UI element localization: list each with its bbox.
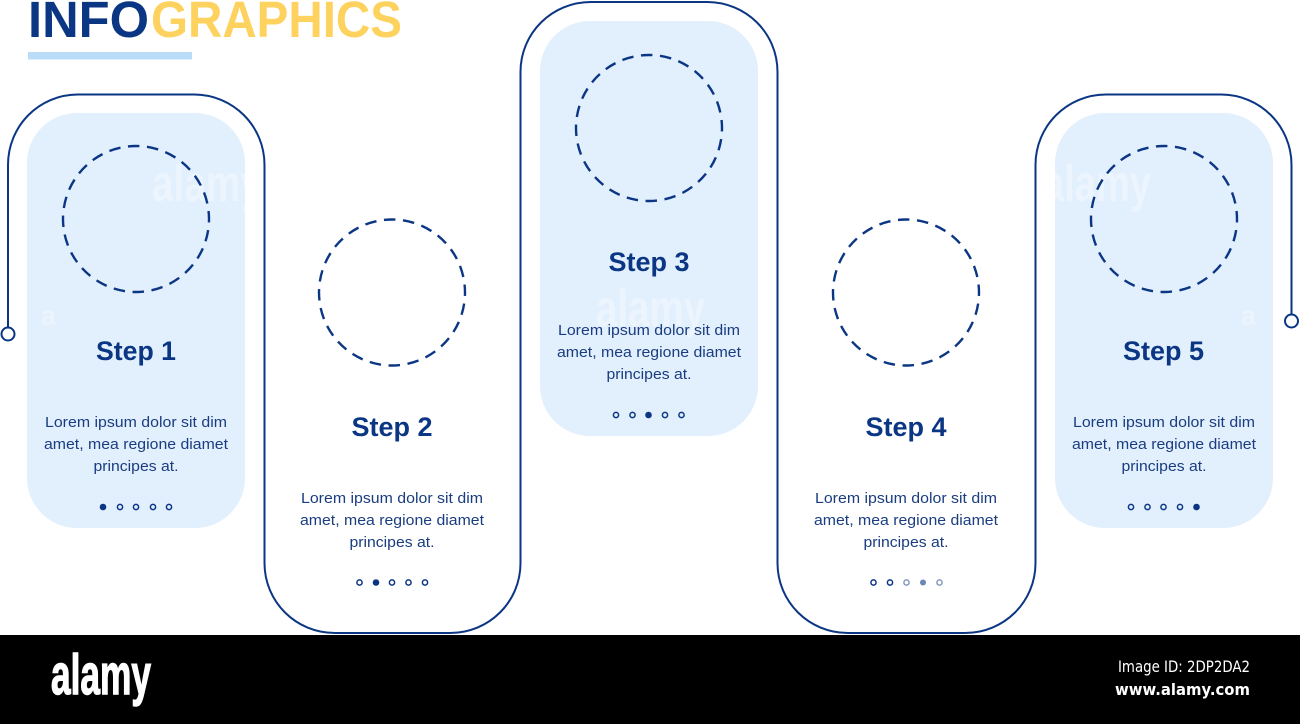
heading: step 3: Step 3 [608, 247, 690, 277]
title underline [28, 52, 192, 60]
text: step 3: amet, mea regione diamet [557, 344, 742, 361]
footer bar [0, 635, 1300, 724]
progress dots: step 3 [613, 412, 684, 418]
step 5 [1072, 146, 1257, 510]
progress dots: step 1 [100, 504, 172, 510]
icon placeholder: step 4 [833, 220, 979, 366]
text: step 3: principes at. [606, 366, 692, 383]
text: step 1: Lorem ipsum dolor sit dim [45, 414, 227, 431]
text: step 2: amet, mea regione diamet [300, 512, 485, 529]
text: step 5: principes at. [1122, 458, 1206, 475]
heading: step 4: Step 4 [866, 412, 946, 442]
text: step 1 [44, 414, 229, 475]
icon placeholder: step 3 [576, 55, 722, 201]
text: step 3 [557, 322, 742, 383]
connector end: right [1285, 314, 1298, 328]
watermarks: alamy [596, 280, 705, 338]
text: step 2: principes at. [350, 534, 434, 551]
watermarks [41, 155, 1256, 338]
step 3 [557, 55, 742, 418]
title [28, 0, 402, 48]
connector end: left [2, 328, 14, 340]
text: step 2: Lorem ipsum dolor sit dim [301, 490, 483, 507]
icon placeholder: step 5 [1091, 146, 1237, 292]
text: step 4: Lorem ipsum dolor sit dim [815, 490, 997, 507]
step 2 [300, 220, 485, 586]
icon placeholder: step 1 [63, 146, 209, 292]
text: step 3: Lorem ipsum dolor sit dim [558, 322, 740, 339]
progress dots: step 5 [1128, 504, 1200, 510]
icon placeholder: step 2 [319, 220, 465, 366]
text: step 5: amet, mea regione diamet [1072, 436, 1257, 453]
watermarks: a [41, 300, 56, 331]
text: step 1: principes at. [94, 458, 178, 475]
footer url: www.alamy.com [1115, 680, 1250, 699]
panel: step 3 background [540, 21, 758, 436]
text: step 5 [1072, 414, 1257, 475]
step 4 [814, 220, 999, 586]
heading: step 2: Step 2 [352, 412, 432, 442]
text: step 4 [814, 490, 999, 551]
panel: step 1 background [27, 113, 245, 528]
progress dots: step 2 [357, 579, 428, 586]
footer image id: Image ID: 2DP2DA2 [1118, 657, 1250, 676]
text: step 1: amet, mea regione diamet [44, 436, 229, 453]
text: step 4: amet, mea regione diamet [814, 512, 999, 529]
progress dots: step 4 [871, 580, 942, 586]
text: step 2 [300, 490, 485, 551]
panel: step 5 background [1055, 113, 1273, 528]
footer logo: alamy [51, 643, 151, 707]
step 1 [44, 146, 229, 510]
text: step 4: principes at. [864, 534, 948, 551]
watermarks: a [1241, 300, 1256, 331]
heading: step 1: Step 1 [96, 336, 176, 366]
heading: step 5: Step 5 [1123, 336, 1204, 366]
text: step 5: Lorem ipsum dolor sit dim [1073, 414, 1255, 431]
